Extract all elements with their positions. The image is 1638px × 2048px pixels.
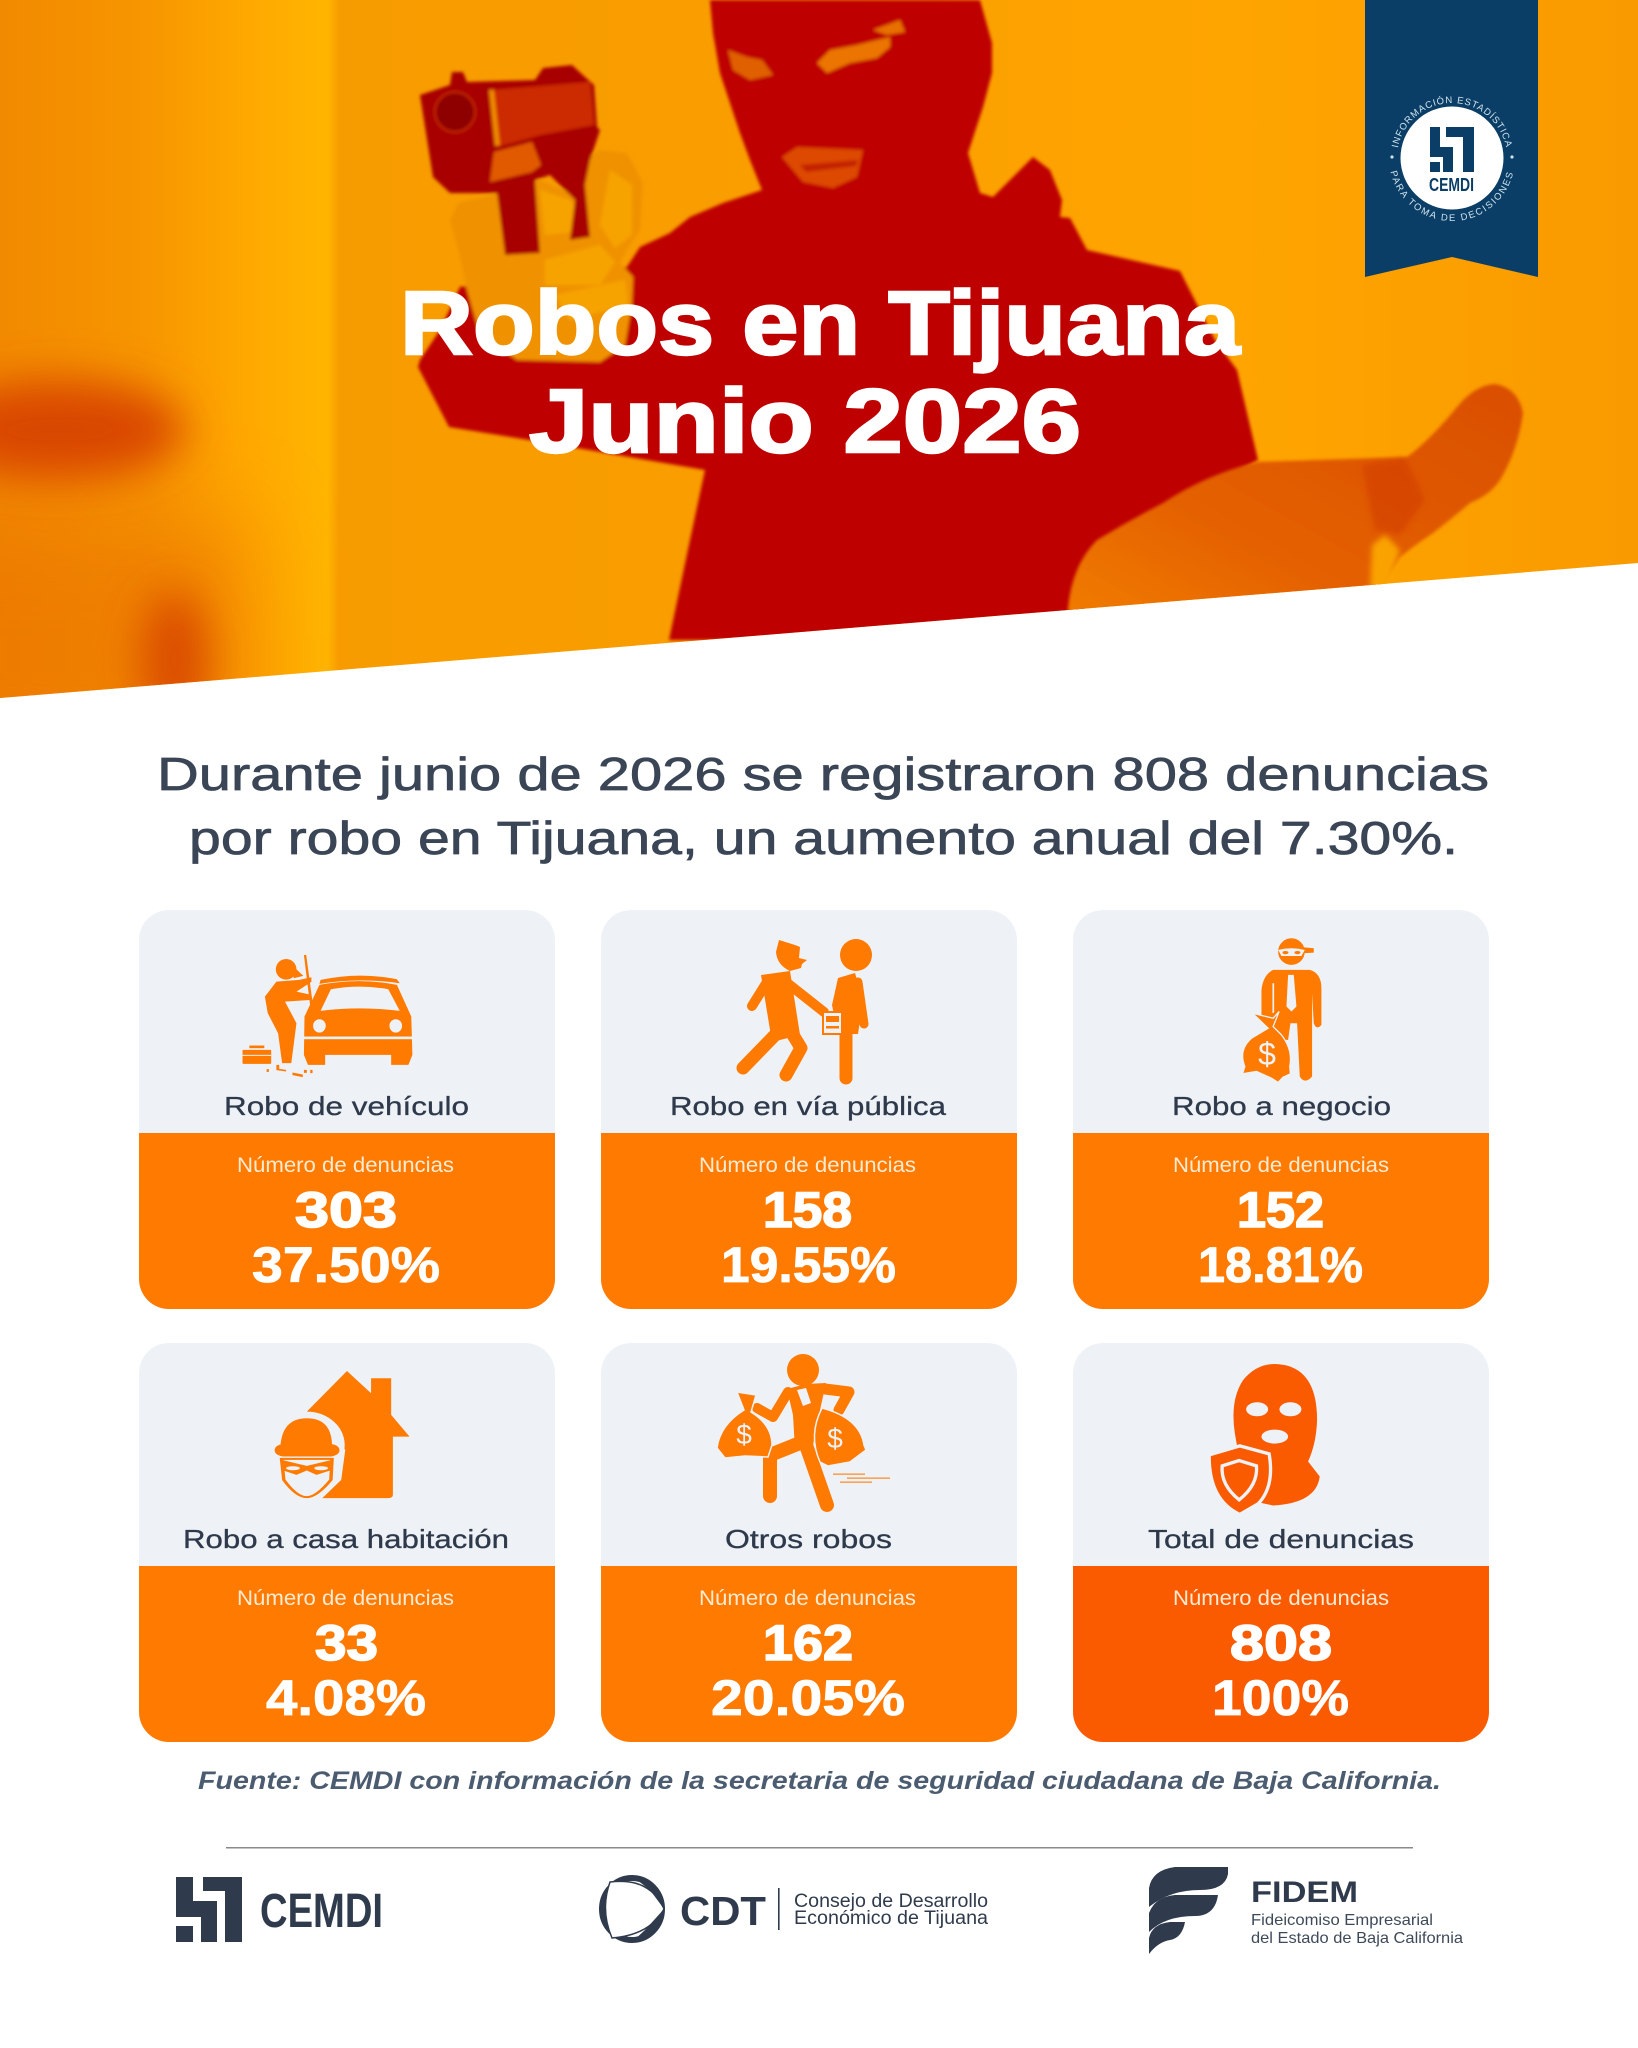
ribbon: CEMDI seal: PARA TOMA DE DECISIONES bbox=[1390, 170, 1513, 221]
logo: CDT: Económico de Tijuana bbox=[794, 1908, 988, 1929]
panel: Robo a casa habitación bbox=[139, 1343, 555, 1742]
percentage: 18.81% bbox=[1198, 1237, 1363, 1293]
number: 33 bbox=[315, 1615, 378, 1671]
icon: balaclava and shield bbox=[1209, 1364, 1320, 1514]
icon: business robber: $ bbox=[1258, 1036, 1276, 1072]
logo: CDT: CDT bbox=[680, 1888, 766, 1934]
open hand bbox=[1066, 382, 1525, 610]
label: Robo a negocio bbox=[1172, 1091, 1391, 1121]
logo: FIDEM: del Estado de Baja California bbox=[1251, 1930, 1463, 1947]
number: 162 bbox=[763, 1615, 853, 1671]
number: 158 bbox=[763, 1182, 852, 1238]
title: Robos en Tijuana bbox=[400, 274, 1241, 374]
label: Total de denuncias bbox=[1148, 1524, 1414, 1554]
panel: Otros robos bbox=[601, 1343, 1017, 1742]
number: 808 bbox=[1230, 1615, 1332, 1671]
intro statement: por robo en Tijuana, un aumento anual del 7.30%. bbox=[189, 812, 1458, 864]
percentage: 20.05% bbox=[711, 1670, 905, 1726]
logo: FIDEM bbox=[1149, 1867, 1463, 1954]
ribbon: CEMDI seal: INFORMACIÓN ESTADÍSTICA bbox=[1392, 96, 1512, 148]
percentage: 4.08% bbox=[266, 1670, 426, 1726]
caption: Número de denuncias bbox=[1173, 1587, 1389, 1610]
icon: house burglar bbox=[269, 1371, 410, 1498]
logo: CDT: Consejo de Desarrollo bbox=[794, 1891, 988, 1912]
icon: fleeing thief with money bags bbox=[717, 1354, 890, 1505]
label: Otros robos bbox=[725, 1524, 892, 1554]
panel: Robo a negocio bbox=[1073, 910, 1489, 1309]
body and head bbox=[418, 0, 1258, 640]
source note: Fuente: CEMDI con información de la secretaria de seguridad ciudadana de Baja California. bbox=[198, 1767, 1441, 1795]
intro statement: Durante junio de 2026 se registraron 808 denuncias bbox=[157, 748, 1489, 800]
logo: CDT bbox=[602, 1876, 988, 1942]
icon: fleeing thief with money bags: $ bbox=[827, 1423, 843, 1454]
percentage: 19.55% bbox=[721, 1237, 896, 1293]
ribbon: CEMDI seal: CEMDI bbox=[1429, 175, 1474, 195]
pistol bbox=[420, 65, 600, 255]
title bbox=[400, 274, 1241, 472]
number: 303 bbox=[295, 1182, 397, 1238]
panel: Total de denuncias bbox=[1073, 1343, 1489, 1742]
hero photo: masked robber with gun bbox=[0, 0, 1638, 698]
panel: Robo de vehículo bbox=[139, 910, 555, 1309]
icon: car thief bbox=[243, 955, 412, 1077]
logo: CEMDI bbox=[176, 1877, 383, 1942]
logo: CEMDI: CEMDI bbox=[260, 1885, 383, 1938]
number: 152 bbox=[1237, 1182, 1324, 1238]
caption: Número de denuncias bbox=[237, 1587, 454, 1610]
label: Robo a casa habitación bbox=[183, 1524, 509, 1554]
percentage: 37.50% bbox=[252, 1237, 440, 1293]
ribbon: CEMDI seal bbox=[1365, 0, 1538, 277]
caption: Número de denuncias bbox=[237, 1154, 454, 1177]
percentage: 100% bbox=[1212, 1670, 1349, 1726]
icon: street robbery bbox=[743, 939, 872, 1078]
icon: business robber bbox=[1242, 938, 1321, 1082]
caption: Número de denuncias bbox=[699, 1587, 916, 1610]
logo: FIDEM: Fideicomiso Empresarial bbox=[1251, 1912, 1433, 1929]
label: Robo en vía pública bbox=[670, 1091, 947, 1121]
hand holding the gun bbox=[450, 150, 643, 362]
panel: Robo en vía pública bbox=[601, 910, 1017, 1309]
caption: Número de denuncias bbox=[1173, 1154, 1389, 1177]
logo: FIDEM: FIDEM bbox=[1251, 1876, 1358, 1909]
intro statement bbox=[157, 748, 1489, 864]
eye holes and mouth bbox=[728, 50, 773, 80]
title: Junio 2026 bbox=[529, 372, 1081, 472]
caption: Número de denuncias bbox=[699, 1154, 916, 1177]
label: Robo de vehículo bbox=[224, 1091, 469, 1121]
icon: fleeing thief with money bags: $ bbox=[736, 1419, 752, 1450]
